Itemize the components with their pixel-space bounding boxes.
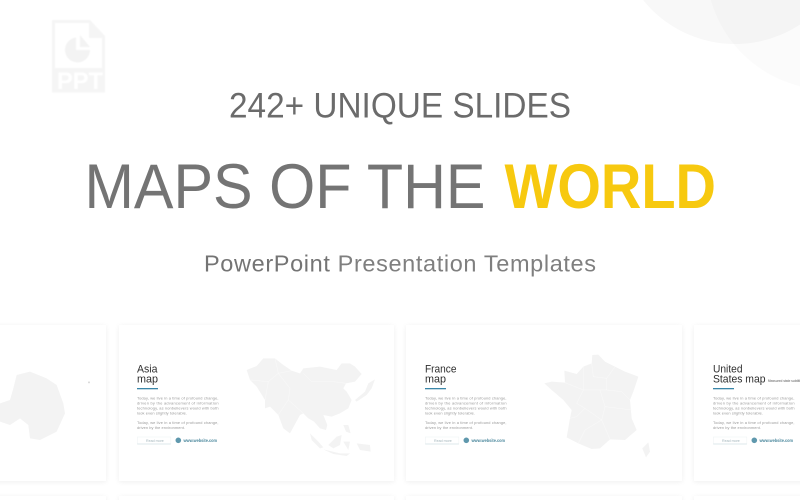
body text: driven by the environment. [425,425,473,430]
body text: driven by the advancement of information [425,400,506,406]
heading: France map: France [425,364,456,376]
body text: look even slightly tolerable. [713,410,763,416]
website link: www.website.com [471,438,505,443]
button: read more [713,437,747,444]
accent rule [137,388,158,389]
title: maps of the world [84,152,716,222]
panel: Asia slide [119,325,394,481]
website link [464,438,505,443]
body text: look even slightly tolerable. [137,410,187,416]
tagline: PowerPoint Presentation Templates [204,250,596,276]
body text: Today, we live in a time of profound change, [713,420,794,425]
heading: United States map [713,364,766,386]
decorative circles top right [617,0,800,90]
body text [137,396,218,430]
title: maps of the world: MAPS OF THE [84,152,486,222]
heading: Asia map [137,364,158,386]
subtitle: slide count: 242+ UNIQUE SLIDES [229,86,571,126]
button: read more [425,437,459,444]
body text: technology, as nonbelievers would with both [713,406,794,410]
heading: Asia map: Asia [137,364,158,376]
heading: United States map: States map [713,374,766,386]
icon: PPT file: PPT [57,68,103,95]
button: read more [137,437,171,444]
icon: PPT file [52,20,105,95]
accent rule [713,388,734,389]
button: read more: Read more [434,439,452,443]
button: read more: Read more [722,439,740,443]
map: Asia [247,358,375,456]
card shadows [0,326,800,500]
accent rule [425,388,446,389]
website link: www.website.com [759,438,793,443]
button: read more: Read more [146,439,164,443]
heading: France map: map [425,374,446,386]
website link [752,438,793,443]
map: France [544,355,650,457]
heading: Asia map: map [137,374,158,386]
body text: technology, as nonbelievers would with both [137,406,218,410]
heading: United States map: United [713,364,742,376]
title: maps of the world: WORLD [504,152,716,222]
body text: driven by the advancement of information [137,400,218,406]
body text: driven by the environment. [137,425,185,430]
body text: driven by the environment. [713,425,761,430]
heading: France map [425,364,456,386]
body text [425,396,506,430]
panel: United States slide [694,325,800,481]
website link [176,438,217,443]
next row of slides [0,496,800,500]
body text: Today, we live in a time of profound change, [713,396,794,400]
body text: Today, we live in a time of profound change, [425,420,506,425]
body text: driven by the advancement of information [713,400,794,406]
body text: Today, we live in a time of profound change, [425,396,506,400]
body text: technology, as nonbelievers would with both [425,406,506,410]
map: Antarctica [0,372,90,440]
website link: www.website.com [183,438,217,443]
panel: France slide [406,325,682,481]
body text [713,396,794,430]
panel: Antarctica slide [0,325,106,481]
body text: Today, we live in a time of profound change, [137,396,218,400]
body text: Today, we live in a time of profound change, [137,420,218,425]
body text: look even slightly tolerable. [425,410,475,416]
